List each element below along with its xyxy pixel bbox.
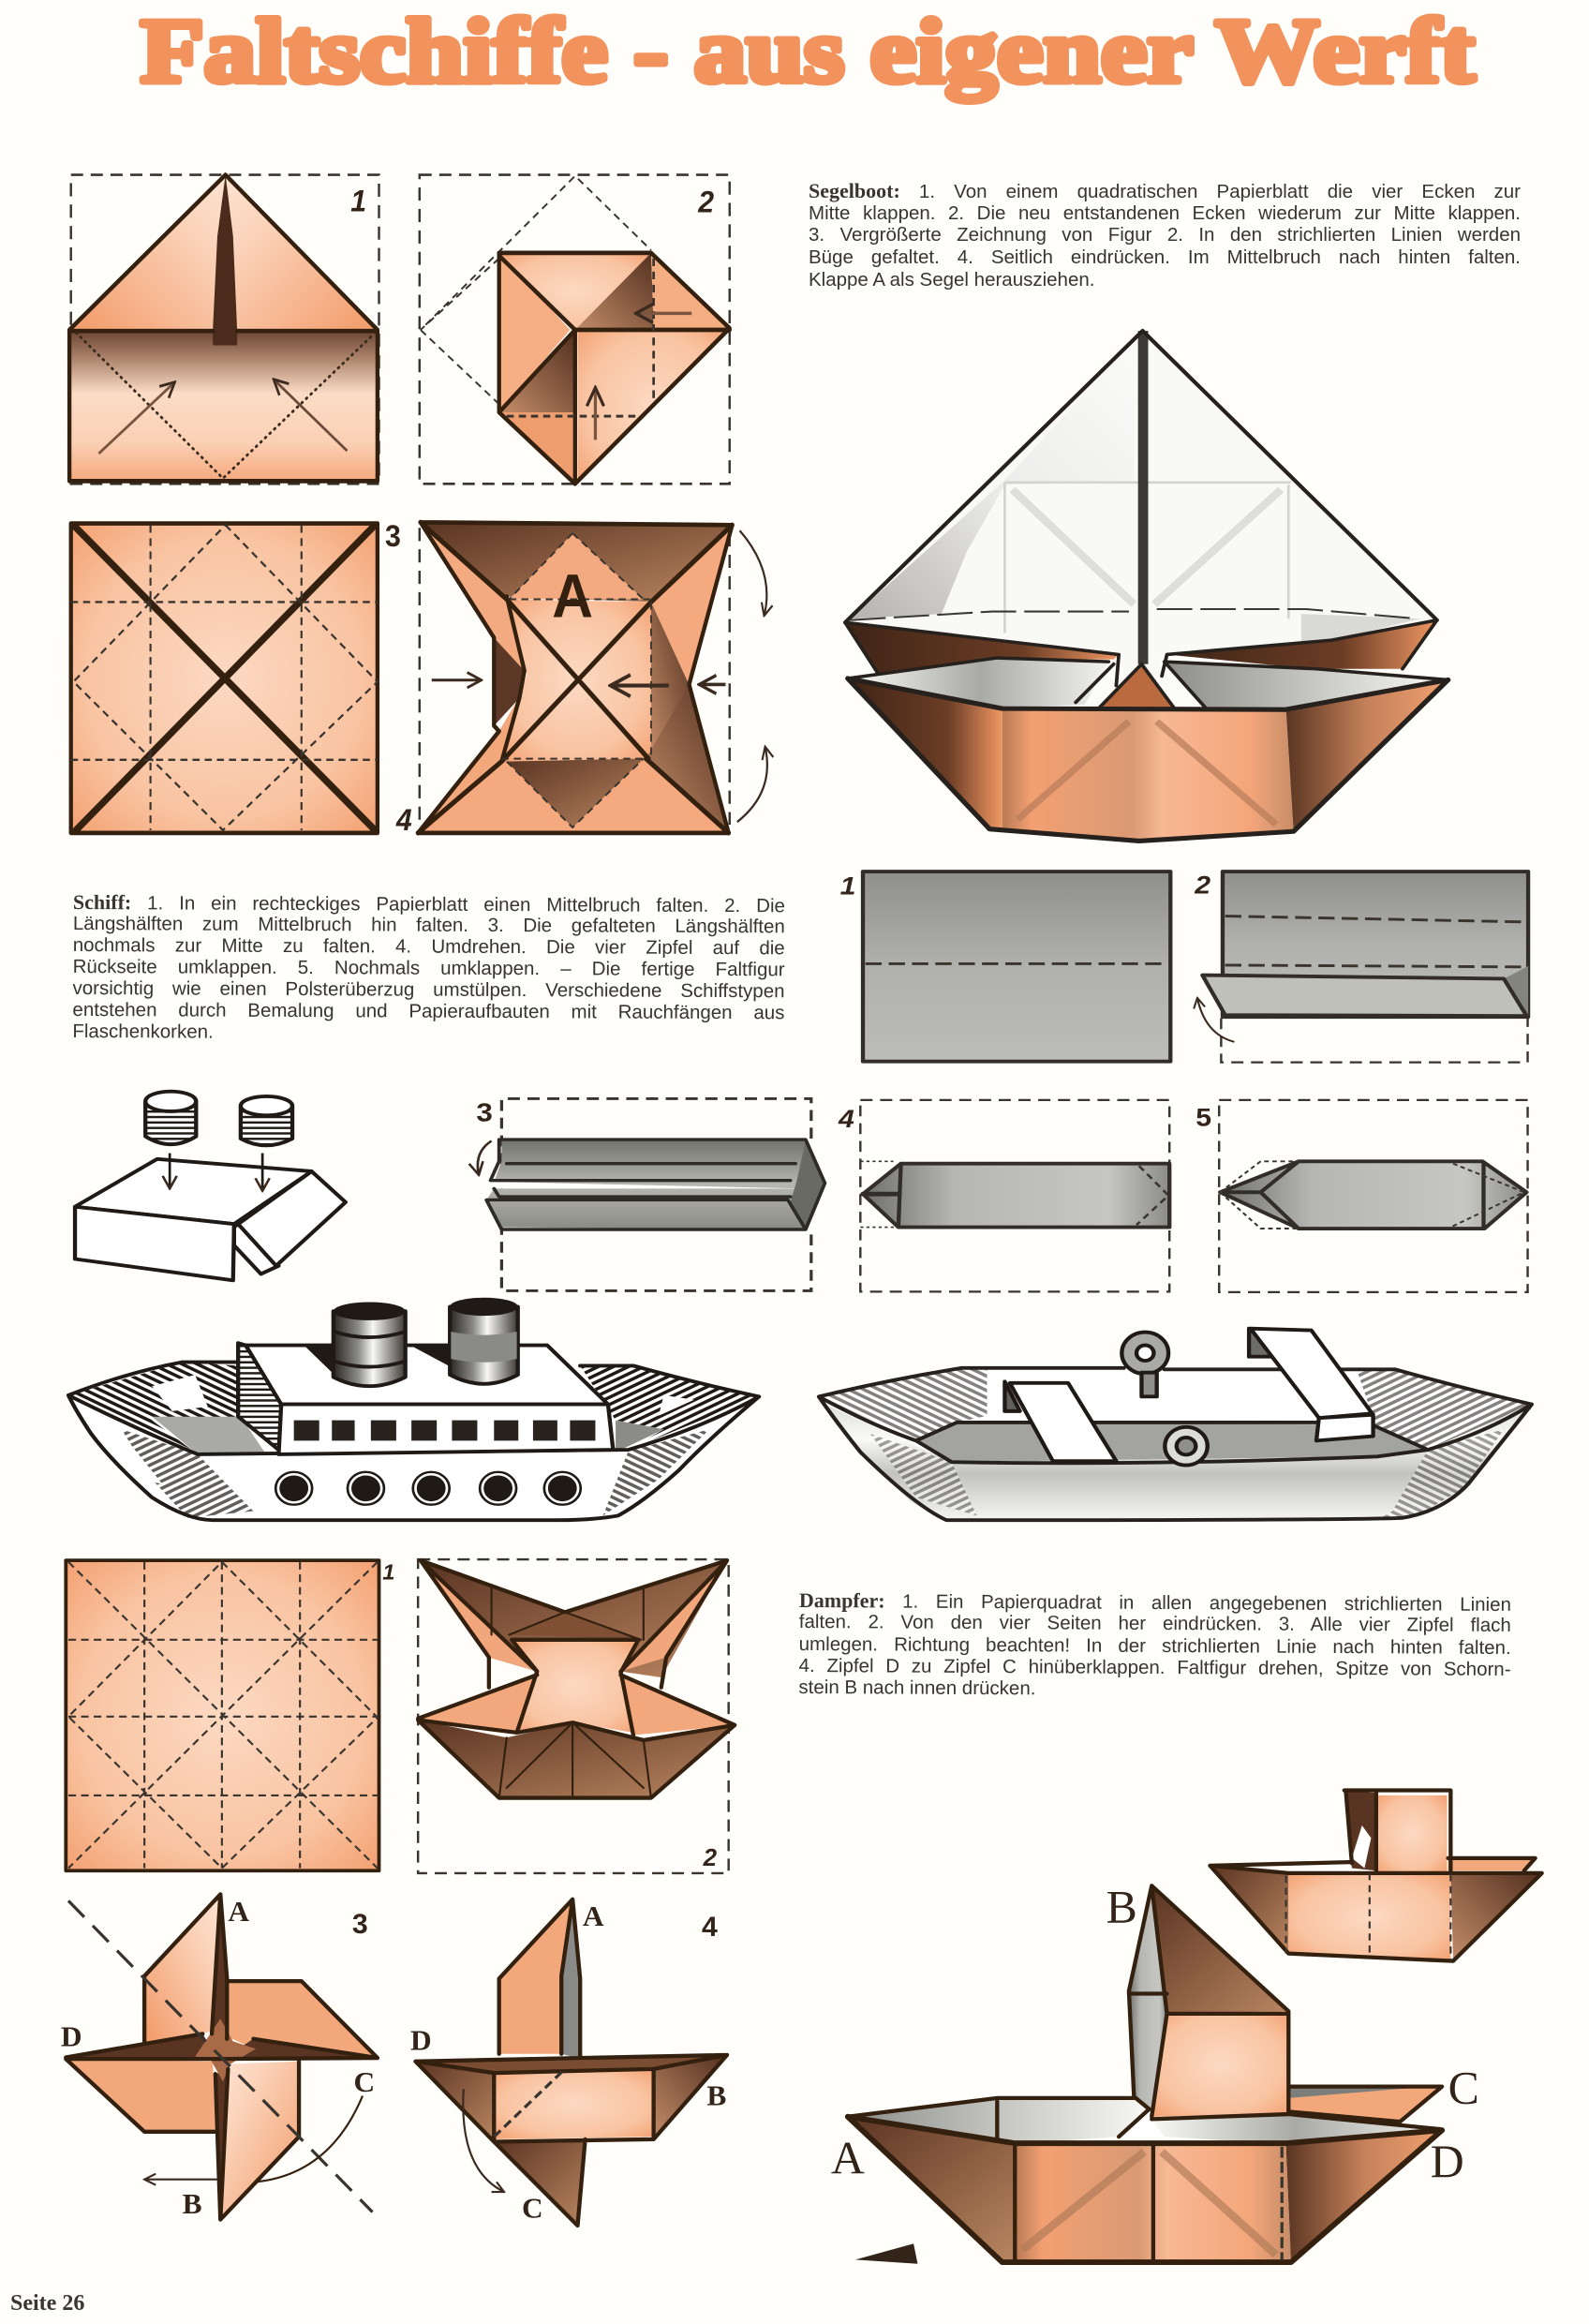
panel: Dampfer folding diagrams — [61, 1559, 735, 2226]
text block: Segelboot instructions: Mitte klappen. 2. Die neu entstandenen Ecken wiederum zur Mitte klappen. — [809, 202, 1521, 224]
figure: Schiff step 1: 1 — [840, 872, 856, 901]
figure: Segelboot step 1: 1 — [350, 183, 366, 218]
figure: Schiff step 2 — [1194, 872, 1528, 1063]
figure: Dampfer step 3 — [61, 1894, 378, 2220]
panel: finished Dampfer boats — [831, 1791, 1542, 2264]
figure: Schiff step 5 — [1195, 1100, 1528, 1292]
figure: Segelboot step 4: A — [552, 562, 593, 631]
figure: Schiff step 3: 3 — [476, 1098, 493, 1127]
figure: Segelboot step 3 — [71, 518, 401, 833]
text block: Schiff instructions: vorsichtig wie einen Polsterüberzug umstülpen. Verschiedene Schiffstypen — [72, 977, 785, 1002]
figure: Dampfer step 3: D — [61, 2020, 82, 2053]
text block: Schiff instructions: Schiff: 1. In ein rechteckiges Papierblatt einen Mittelbruch falten. 2. Die — [73, 890, 785, 916]
figure: Dampfer step 3: B — [183, 2187, 202, 2220]
text block: Segelboot instructions: 3. Vergrößerte Zeichnung von Figur 2. In den strichlierten Linien werden — [809, 224, 1521, 246]
figure: Schiff step 1 — [840, 872, 1170, 1062]
figure: Segelboot step 2 — [420, 175, 730, 484]
figure: Dampfer step 4: 4 — [702, 1912, 718, 1943]
figure: Schiff step 5: 5 — [1195, 1104, 1211, 1132]
figure: Segelboot step 4 — [395, 522, 767, 837]
panel: Schiff step 3, corks and hull — [68, 1092, 824, 1520]
figure: Schiff step 4 — [838, 1100, 1169, 1291]
illustration: large Dampfer with labelled corners — [831, 1882, 1479, 2264]
text block: Schiff instructions: Flaschenkorken. — [72, 1020, 214, 1043]
title: Faltschiffe - aus eigener Werft — [141, 1, 1475, 102]
figure: Segelboot step 2: 2 — [697, 184, 714, 219]
text block: Schiff instructions: Längshälften zum Mittelbruch hin falten. 3. Die gefalteten Längshälften — [73, 913, 785, 937]
text block: Schiff instructions: Rückseite umklappen. 5. Nochmals umklappen. – Die fertige Faltfigur — [73, 956, 785, 980]
text block: Schiff instructions — [72, 890, 785, 1043]
illustration: corks above box — [75, 1092, 346, 1280]
illustration: small finished steamer — [1210, 1791, 1542, 1961]
illustration: large Dampfer with labelled corners: A — [831, 2132, 865, 2183]
figure: Segelboot step 1 — [69, 175, 379, 484]
figure: Dampfer step 1 — [66, 1560, 395, 1870]
panel: finished Segelboot — [845, 331, 1448, 841]
figure: Dampfer step 2: 2 — [703, 1845, 718, 1871]
figure: Schiff step 2: 2 — [1194, 872, 1210, 900]
figure: Dampfer step 4: C — [522, 2192, 543, 2224]
figure: Schiff step 3 — [476, 1098, 824, 1290]
figure: Dampfer step 2 — [418, 1559, 735, 1873]
text block: Schiff instructions: nochmals zur Mitte zu falten. 4. Umdrehen. Die vier Zipfel auf die — [73, 934, 785, 959]
figure: Dampfer step 1: 1 — [382, 1561, 395, 1586]
illustration: painted ship with deck planks — [819, 1329, 1532, 1520]
panel: Schiff steps 1 and 2 plus steps 4 and 5 — [838, 872, 1528, 1292]
text block: Dampfer instructions: 4. Zipfel D zu Zipfel C hinüberklappen. Faltfigur drehen, Spitze von Schorn- — [799, 1655, 1511, 1680]
illustration: large Dampfer with labelled corners: C — [1448, 2062, 1479, 2113]
text block: Dampfer instructions: falten. 2. Von den vier Seiten her eindrücken. 3. Alle vier Zipfel flach — [799, 1611, 1511, 1636]
illustration: large Dampfer with labelled corners: B — [1106, 1882, 1137, 1932]
figure: Segelboot step 3: 3 — [385, 518, 401, 553]
text block: Schiff instructions: entstehen durch Bemalung und Papieraufbauten mit Rauchfängen aus — [72, 999, 784, 1023]
text block: Dampfer instructions: Dampfer: 1. Ein Papierquadrat in allen angegebenen strichlierten Linien — [799, 1588, 1511, 1616]
figure: Dampfer step 3: C — [353, 2065, 375, 2098]
illustration: steamship with portholes — [68, 1298, 759, 1520]
text block: Dampfer instructions: stein B nach innen drücken. — [798, 1676, 1036, 1700]
figure: Dampfer step 4 — [410, 1899, 727, 2226]
figure: Dampfer step 4: A — [583, 1899, 604, 1932]
text block: Segelboot instructions: Büge gefaltet. 4. Seitlich eindrücken. Im Mittelbruch nach hinten falten. — [809, 246, 1521, 268]
text block: Segelboot instructions: Segelboot: 1. Von einem quadratischen Papierblatt die vier Ecken zur — [809, 179, 1521, 202]
panel: Segelboot folding diagrams — [69, 175, 767, 837]
figure: Dampfer step 3: A — [228, 1895, 249, 1928]
text block: Dampfer instructions — [798, 1588, 1511, 1700]
figure: Dampfer step 3: 3 — [352, 1909, 368, 1940]
text block: Segelboot instructions — [809, 179, 1521, 290]
text block: Segelboot instructions: Klappe A als Segel herausziehen. — [809, 269, 1094, 290]
figure: Segelboot step 4: 4 — [395, 802, 412, 837]
figure: Dampfer step 4: B — [706, 2079, 726, 2111]
figure: Schiff step 4: 4 — [838, 1105, 854, 1134]
page number: Seite 26 — [10, 2291, 84, 2316]
illustration: large Dampfer with labelled corners: D — [1431, 2136, 1464, 2187]
figure: Dampfer step 4: D — [410, 2024, 432, 2056]
text block: Dampfer instructions: umlegen. Richtung beachten! In der strichlierten Linie nach hinten falten. — [799, 1633, 1511, 1659]
